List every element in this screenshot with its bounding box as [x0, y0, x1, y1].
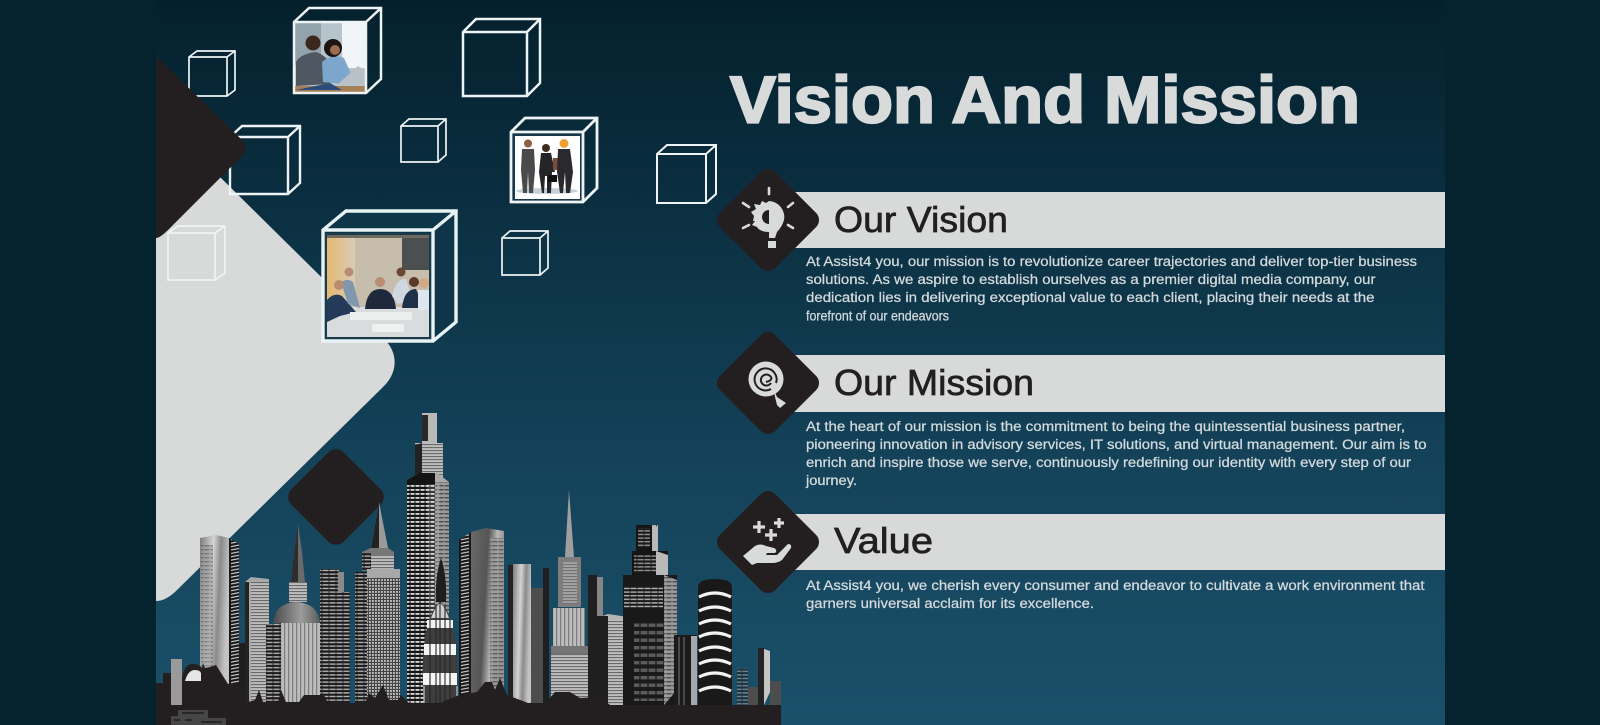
- body text: garners universal acclaim for its excellence.: [806, 596, 1094, 612]
- dark corner diamond: [156, 56, 246, 238]
- dark low block: [674, 635, 697, 705]
- stepped black tower: [623, 525, 677, 705]
- cube on grey diamond: [168, 226, 225, 280]
- fill behind open cube side: [323, 211, 456, 341]
- small right blocks: [737, 648, 781, 705]
- dark slab behind: [588, 575, 603, 705]
- body text: enrich and inspire those we serve, continuously redefining our identity with every step of our: [806, 455, 1411, 471]
- icon: target with arrow: [713, 328, 823, 438]
- tower one: [200, 535, 239, 690]
- dark office block: [320, 569, 350, 705]
- photo: cartoon professionals: [513, 134, 582, 201]
- heading bar: [770, 514, 1445, 570]
- heading: Value: [834, 520, 933, 561]
- icon: light bulb with gear: [713, 165, 823, 275]
- cube small center: [401, 119, 446, 162]
- tower two: [245, 577, 269, 705]
- heading bar: [770, 192, 1445, 248]
- photo cube: two colleagues at laptop: [294, 8, 381, 93]
- section: our vision: [713, 165, 1445, 324]
- body text: journey.: [805, 473, 857, 489]
- photo: meeting team: [325, 233, 431, 339]
- dark slab behind left towers: [239, 643, 247, 705]
- photo cube: team at meeting table: [323, 211, 456, 341]
- heading: Our Vision: [834, 199, 1008, 240]
- needle tower: [551, 490, 590, 705]
- cube left behind dark diamond: [230, 126, 300, 194]
- body text: [806, 254, 1417, 324]
- spire tower with dome: [266, 524, 327, 705]
- body text: forefront of our endeavors: [806, 308, 949, 324]
- cube empty large top: [463, 19, 540, 96]
- cube outline: [511, 118, 597, 202]
- cube outline: [294, 8, 381, 93]
- small dome windows: [185, 670, 201, 681]
- small dark diamond: [284, 445, 388, 549]
- section: our mission: [713, 328, 1445, 489]
- large light grey diamond: [156, 177, 395, 601]
- heading: Our Mission: [834, 362, 1034, 403]
- gherkin tower: [423, 558, 457, 705]
- body text: At Assist4 you, our mission is to revolutionize career trajectories and deliver top-tier business: [806, 254, 1417, 270]
- far left small tower: [171, 659, 182, 705]
- angled grey tower: [459, 528, 504, 702]
- cube right of centre: [657, 145, 716, 203]
- body text: pioneering innovation in advisory services, IT solutions, and virtual management. Our aim is to: [806, 437, 1427, 453]
- striped cylinder tower: [698, 579, 732, 705]
- body text: dedication lies in delivering exceptional value to each client, placing their needs at the: [806, 290, 1375, 306]
- title: Vision And Mission: [730, 62, 1360, 136]
- cube small lower: [502, 231, 548, 275]
- cube small top left: [189, 51, 235, 96]
- tallest tower: [407, 413, 449, 705]
- city skyline illustration: [156, 413, 781, 725]
- grey and dark slabs: [531, 568, 549, 705]
- grid tower with spire: [355, 502, 400, 705]
- striped light tower: [597, 614, 628, 705]
- body text: solutions. As we aspire to establish ourselves as a premier digital media company, our: [806, 272, 1376, 288]
- body text: [805, 419, 1427, 489]
- heading bar: [770, 355, 1445, 412]
- cube outline: [323, 211, 456, 341]
- photo: colleagues: [295, 23, 365, 92]
- ghost building on ground: [171, 710, 226, 725]
- photo cube: three cartoon professionals: [511, 118, 597, 202]
- body text: At Assist4 you, we cherish every consumer and endeavor to cultivate a work environment that: [806, 578, 1425, 594]
- narrow light tower: [508, 564, 531, 705]
- body text: At the heart of our mission is the commitment to being the quintessential business partner,: [806, 419, 1405, 435]
- section: value: [713, 487, 1445, 612]
- foreground silhouette: [156, 663, 781, 725]
- icon: hand with sparkles: [713, 487, 823, 597]
- body text: [806, 578, 1425, 612]
